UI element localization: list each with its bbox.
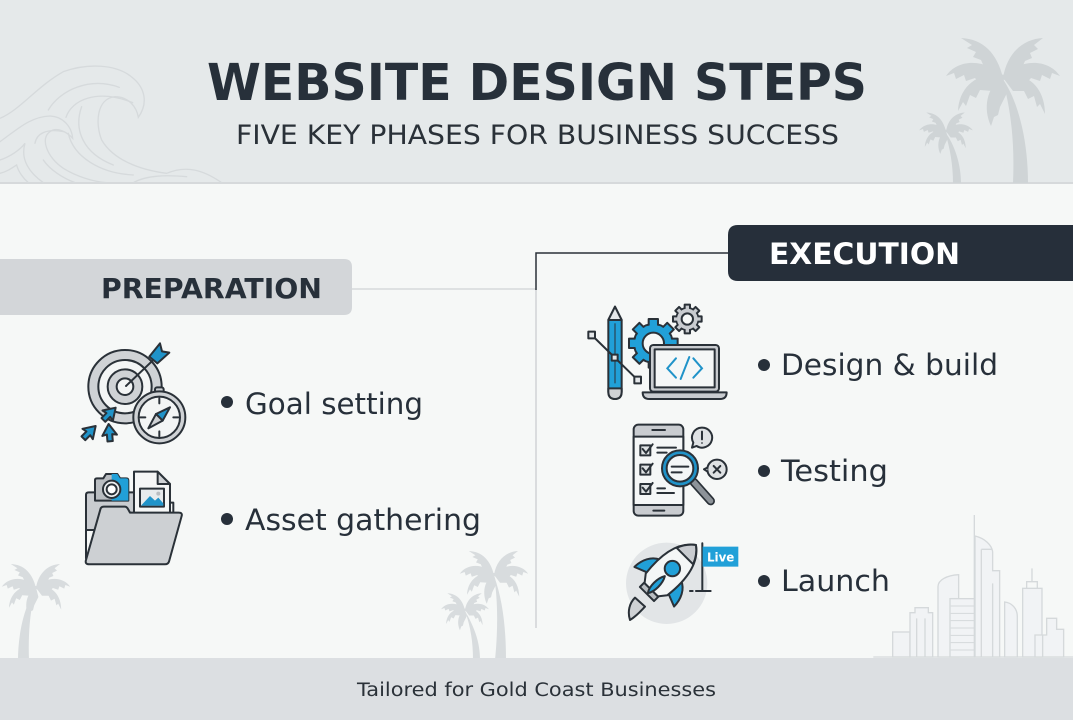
small palm [919,113,973,183]
preparation tab [0,259,352,315]
city skyline [873,515,1073,657]
execution tab: EXECUTION [769,237,960,271]
shorter palm [441,593,489,660]
bullet: design and build: Design & build [781,348,998,382]
icon: folder with camera and image [86,472,182,564]
bullet: launch: Launch [781,564,890,598]
bullet: asset gathering: Asset gathering [245,503,481,537]
taller palm [460,551,528,660]
palm trees top right [919,38,1060,183]
execution tab [728,225,1073,281]
palm trees bottom centre [441,551,528,660]
footer band [0,658,1073,720]
connector lines [352,253,730,628]
icon: phone checklist with magnifier [634,425,727,516]
title: WEBSITE DESIGN STEPS [207,54,867,113]
icon: rocket with live flag [626,525,738,624]
bullet: testing: Testing [780,454,888,488]
palm tree bottom left [2,564,70,660]
footer text: Tailored for Gold Coast Businesses [356,680,716,701]
preparation tab: PREPARATION [101,273,322,305]
icon: design tools, gears and laptop [588,305,727,399]
header band [0,0,1073,184]
icon: target and compass [78,343,185,443]
bullet: goal setting: Goal setting [245,387,423,421]
large palm [946,38,1060,183]
subtitle: FIVE KEY PHASES FOR BUSINESS SUCCESS [236,120,839,151]
wave line art [0,66,222,183]
icon: rocket with live flag: Live [707,551,734,565]
